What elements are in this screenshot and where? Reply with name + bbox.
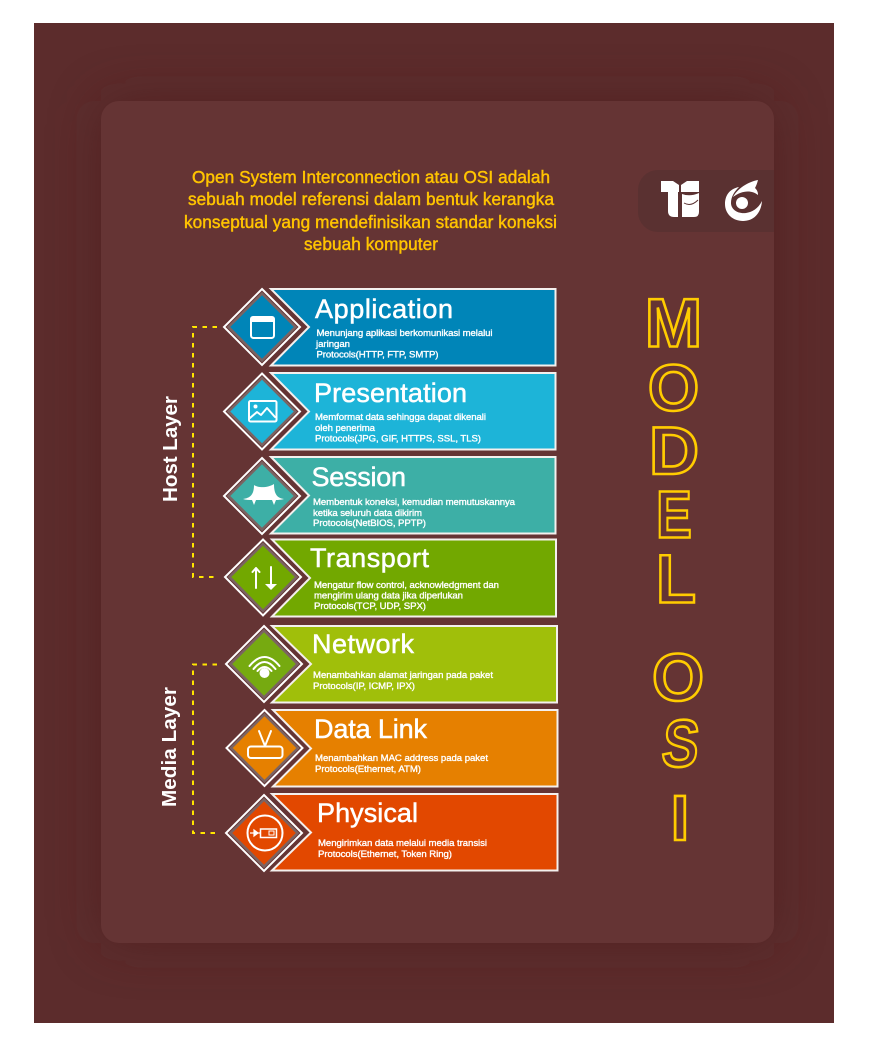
layer: Transport xyxy=(225,540,556,616)
layer: Application xyxy=(224,289,556,366)
text: Mengirimkan data melalui media transisi xyxy=(318,838,487,849)
text: Protocols(Ethernet, Token Ring) xyxy=(318,849,452,860)
text: Protocols(JPG, GIF, HTTPS, SSL, TLS) xyxy=(315,434,481,444)
layer: Data Link xyxy=(226,710,558,786)
panel xyxy=(101,101,774,943)
text: Network xyxy=(312,629,414,659)
logo: swirl eye xyxy=(725,180,762,221)
big title: MODEL OSI xyxy=(645,284,704,854)
text: Presentation xyxy=(314,378,467,408)
logo: TS book xyxy=(661,181,699,217)
text: Memformat data sehingga dapat dikenali xyxy=(315,412,486,423)
icon: session shape xyxy=(243,484,284,505)
band xyxy=(273,710,558,786)
big title: MODEL OSI: L xyxy=(656,541,696,618)
text: Physical xyxy=(317,798,418,828)
band xyxy=(271,373,556,450)
big title: MODEL OSI: O xyxy=(648,350,699,424)
icon: window xyxy=(250,316,275,338)
logo badge xyxy=(638,170,774,232)
text: Menunjang aplikasi berkomunikasi melalui xyxy=(316,328,492,339)
diamond xyxy=(224,289,300,365)
text: Membentuk koneksi, kemudian memutuskannya xyxy=(313,497,516,508)
diamond xyxy=(226,626,302,702)
text: jaringan xyxy=(315,339,350,350)
band xyxy=(272,626,557,702)
band xyxy=(271,457,556,534)
text xyxy=(312,629,493,692)
layer: Network xyxy=(226,626,557,702)
big title: MODEL OSI: M xyxy=(645,284,702,362)
text: Transport xyxy=(310,543,429,573)
band xyxy=(271,289,556,366)
band xyxy=(272,540,556,616)
intro text: sebuah model referensi dalam bentuk kerangka xyxy=(188,189,554,209)
icon: picture xyxy=(249,401,276,422)
label: Media Layer: Media Layer xyxy=(158,687,181,807)
intro text: Open System Interconnection atau OSI adalah xyxy=(192,167,550,187)
intro text xyxy=(184,167,557,254)
text: Session xyxy=(312,462,406,492)
text xyxy=(314,378,486,444)
text: Protocols(HTTP, FTP, SMTP) xyxy=(316,350,438,360)
icon: router xyxy=(248,731,282,758)
panel shadow xyxy=(101,101,774,943)
layer: Physical xyxy=(226,794,558,871)
layer: Session xyxy=(224,457,556,534)
text xyxy=(314,714,488,775)
text: Data Link xyxy=(314,714,428,744)
diamond xyxy=(224,374,300,450)
label: Host Layer: Host Layer xyxy=(159,396,182,502)
intro text: sebuah komputer xyxy=(304,234,438,254)
text: Application xyxy=(315,294,453,324)
diamond xyxy=(226,710,302,786)
layer: Presentation xyxy=(224,373,556,450)
text: Protocols(TCP, UDP, SPX) xyxy=(314,601,426,612)
icon: arrows xyxy=(252,567,277,590)
diamond xyxy=(224,458,300,534)
big title: MODEL OSI: S xyxy=(659,707,703,782)
bracket: host layer xyxy=(193,327,217,577)
text: Menambahkan alamat jaringan pada paket xyxy=(313,670,493,681)
big title: MODEL OSI: E xyxy=(656,477,692,552)
text: Protocols(NetBIOS, PPTP) xyxy=(313,518,426,529)
big title: MODEL OSI: D xyxy=(649,413,699,489)
text: oleh penerima xyxy=(315,423,376,434)
text xyxy=(317,798,487,860)
big title: MODEL OSI: O xyxy=(652,640,704,716)
text xyxy=(312,462,516,529)
icon: wifi xyxy=(250,657,280,678)
text xyxy=(315,294,492,360)
text: Protocols(IP, ICMP, IPX) xyxy=(313,681,415,692)
text: Mengatur flow control, acknowledgment dan xyxy=(314,580,499,591)
diamond xyxy=(225,540,301,616)
text: mengirim ulang data jika diperlukan xyxy=(314,590,463,602)
intro text: konseptual yang mendefinisikan standar koneksi xyxy=(184,212,557,232)
icon: connector xyxy=(248,816,282,850)
diamond xyxy=(226,795,302,871)
big title: MODEL OSI: I xyxy=(671,782,689,854)
text: ketika seluruh data dikirim xyxy=(313,508,422,519)
text: Menambahkan MAC address pada paket xyxy=(315,753,488,764)
text: Protocols(Ethernet, ATM) xyxy=(315,764,421,775)
band xyxy=(272,794,558,870)
text xyxy=(310,543,499,612)
bracket: media layer xyxy=(193,664,217,833)
